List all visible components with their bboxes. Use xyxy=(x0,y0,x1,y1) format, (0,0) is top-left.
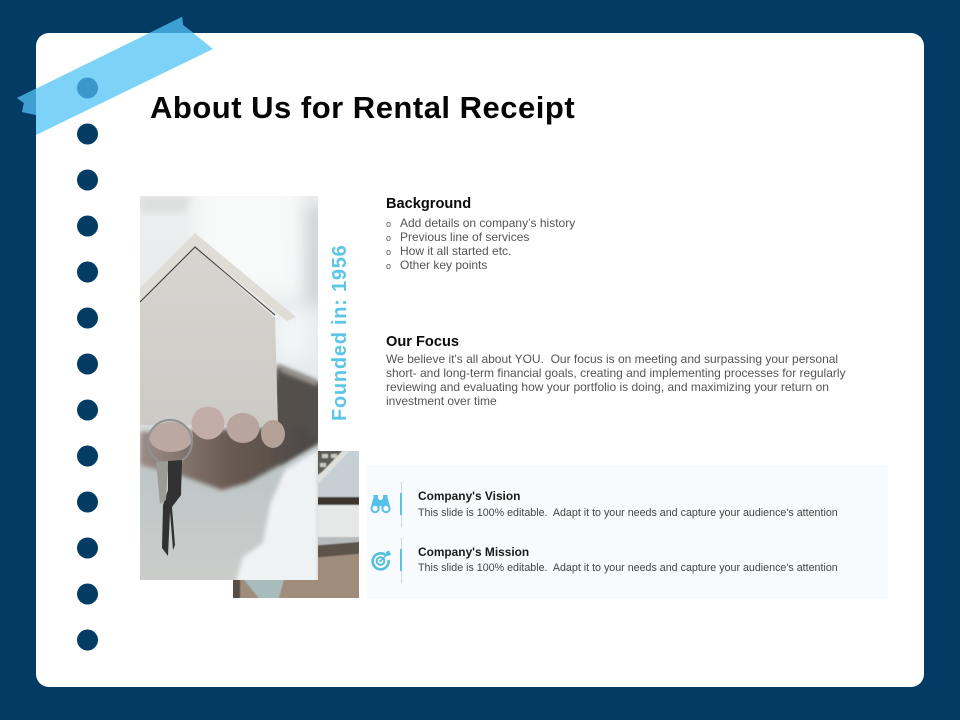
accent bar: vision xyxy=(400,493,402,515)
background bullets: Other key points xyxy=(400,258,487,272)
photo: hand holding model house and keys xyxy=(140,196,318,580)
focus heading: Our Focus xyxy=(386,334,459,350)
divider: vision xyxy=(401,482,402,527)
focus paragraph: investment over time xyxy=(386,394,497,408)
arm xyxy=(276,362,318,467)
divider: mission xyxy=(401,538,402,583)
background bullets: o xyxy=(386,219,391,229)
background bullets xyxy=(386,216,576,272)
background bullets: Previous line of services xyxy=(400,230,529,244)
shirt lower fold xyxy=(237,450,318,585)
icon: target xyxy=(371,550,392,571)
shirt xyxy=(198,196,318,354)
fingers xyxy=(192,406,224,440)
mission heading: Company's Mission xyxy=(418,545,529,559)
focus paragraph xyxy=(386,352,846,408)
panel: vision and mission xyxy=(367,465,888,599)
focus paragraph: reviewing and evaluating how your portfolio is doing, and maximizing your return on xyxy=(386,380,829,394)
vision heading: Company's Vision xyxy=(418,489,520,503)
house xyxy=(140,247,278,425)
background bullets: Add details on company’s history xyxy=(400,216,575,230)
keys xyxy=(162,460,182,556)
our focus section xyxy=(386,334,846,408)
title: About Us for Rental Receipt xyxy=(150,90,575,125)
vertical founded label: Founded in: 1956 xyxy=(329,245,351,421)
focus paragraph: We believe it's all about YOU. Our focus is on meeting and surpassing your personal xyxy=(386,352,838,366)
background bullets: o xyxy=(386,261,391,271)
accent bar: mission xyxy=(400,549,402,571)
decorative tape ribbon xyxy=(17,17,213,135)
background heading: Background xyxy=(386,196,471,212)
mission text: This slide is 100% editable. Adapt it to your needs and capture your audience's attention xyxy=(418,562,838,574)
icon: binoculars xyxy=(370,495,391,514)
hand xyxy=(140,425,317,490)
keyring xyxy=(148,420,192,464)
background section xyxy=(386,196,576,272)
focus paragraph: short- and long-term financial goals, creating and implementing processes for regularly xyxy=(386,366,846,380)
photo: paperwork and calculator xyxy=(233,451,359,598)
background bullets: o xyxy=(386,247,391,257)
background bullets: How it all started etc. xyxy=(400,244,511,258)
background bullets: o xyxy=(386,233,391,243)
vision text: This slide is 100% editable. Adapt it to your needs and capture your audience's attention xyxy=(418,507,838,519)
